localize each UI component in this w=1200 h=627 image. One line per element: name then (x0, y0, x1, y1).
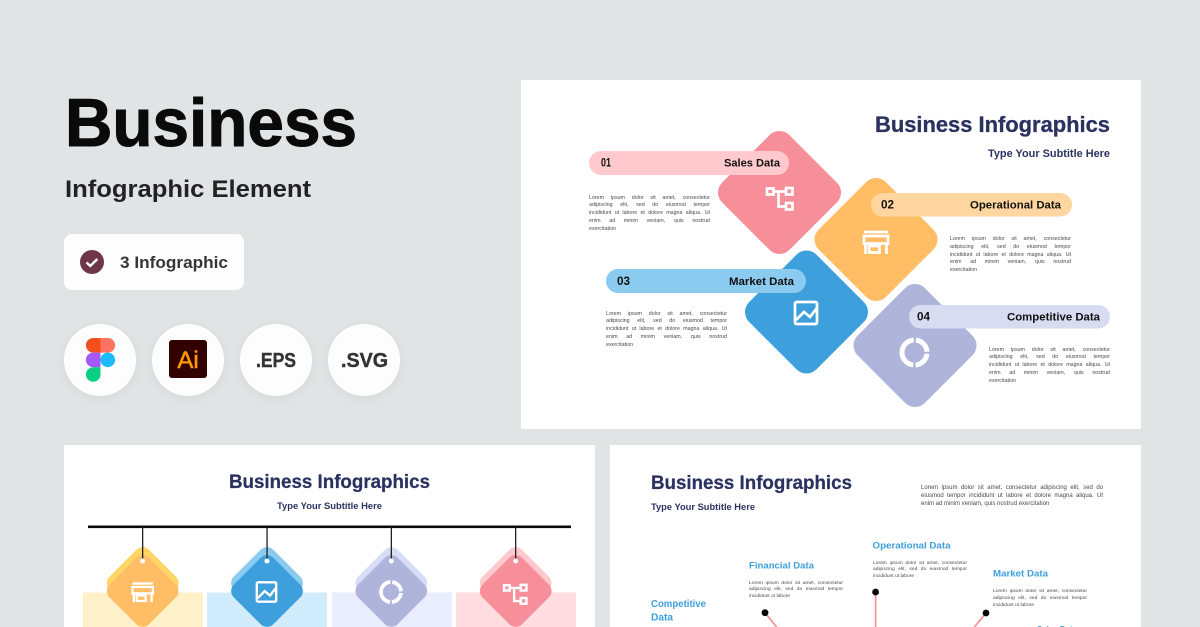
badge: 3 infographic (64, 234, 244, 290)
panel subtitle: Type Your Subtitle Here (651, 502, 755, 513)
text: operational description (950, 236, 1071, 276)
pill: 03 market: 03 (617, 276, 630, 288)
text: competitive description: exercitation (989, 378, 1016, 384)
icon: network (767, 188, 792, 210)
text: intro paragraph: eiusmod tempor incididunt ut labore et dolore magna aliqua. Ut (921, 493, 1103, 499)
text: sales description: Lorem ipsum dolor sit amet, consectetur (589, 194, 710, 200)
text: sales description: exercitation (589, 226, 616, 232)
label: competitive data: Data (651, 612, 673, 624)
text: operational description (873, 560, 967, 582)
pill: 04 competitive: Competitive Data (1007, 312, 1101, 324)
pill: 02 operational (871, 193, 1072, 216)
text: market description: exercitation (606, 342, 633, 348)
tag: operational (103, 527, 182, 627)
text: operational description: exercitation (950, 267, 977, 273)
text: sales description: adipiscing elit, sed do eiusmod tempor (589, 202, 710, 208)
text: sales description: incididunt ut labore et dolore magna aliqua. Ut (589, 210, 710, 216)
text: competitive description: incididunt ut labore et dolore magna aliqua. Ut (989, 362, 1110, 368)
text: financial description: adipiscing elit, sed do eiusmod tempor (749, 587, 843, 592)
icon: shop (864, 232, 888, 254)
marker: market (983, 610, 989, 616)
tag: sales (476, 527, 555, 627)
icon: figma (64, 324, 136, 396)
label: competitive data: Competitive (651, 599, 706, 610)
text: financial description: incididunt ut labore (749, 594, 790, 599)
pill: 02 operational: Operational Data (970, 200, 1062, 212)
text: operational description: adipiscing elit, sed do eiusmod tempor (950, 244, 1071, 250)
text: competitive description: adipiscing elit, sed do eiusmod tempor (989, 354, 1110, 360)
text: operational description: enim ad minim veniam, quis nostrud (950, 259, 1071, 265)
pill: 04 competitive (909, 305, 1110, 328)
text: sales description: enim ad minim veniam, quis nostrud (589, 218, 710, 224)
subtitle: Infographic Element (65, 176, 311, 203)
pill: 01 sales: Sales Data (724, 158, 781, 170)
text: operational description: incididunt ut labore et dolore magna aliqua. Ut (950, 252, 1071, 258)
text: operational description: Lorem ipsum dolor sit amet, consectetur (873, 560, 967, 566)
marker: operational (872, 589, 879, 595)
text: market description (993, 589, 1087, 611)
text: market description: incididunt ut labore (993, 603, 1034, 608)
text: market description: incididunt ut labore et dolore magna aliqua. Ut (606, 326, 727, 332)
text: operational description: Lorem ipsum dolor sit amet, consectetur (950, 236, 1071, 242)
panel subtitle: Type Your Subtitle Here (988, 148, 1110, 160)
pill: 03 market (606, 269, 806, 293)
text: market description: adipiscing elit, sed do eiusmod tempor (993, 596, 1087, 601)
text: market description: adipiscing elit, sed do eiusmod tempor (606, 318, 727, 324)
text: market description: enim ad minim veniam, quis nostrud (606, 334, 727, 340)
icon: check (80, 250, 104, 274)
tag: market (227, 527, 307, 627)
hanging bar (88, 526, 571, 528)
pink connector lines (765, 592, 986, 627)
label: operational data: Operational Data (872, 540, 951, 552)
text: operational description: incididunt ut labore (873, 574, 914, 579)
badge label: 3 Infographic (120, 254, 228, 272)
text: competitive description: enim ad minim veniam, quis nostrud (989, 370, 1110, 376)
icon: eps format (240, 324, 312, 396)
icon: svg format: .SVG (341, 350, 388, 372)
panel title: Business Infographics (229, 471, 430, 493)
icon: svg format (328, 324, 400, 396)
text: intro paragraph: Lorem ipsum dolor sit amet, consectetur adipiscing elit, sed do (921, 484, 1103, 490)
label: competitive data (651, 599, 706, 624)
panel: diamond infographic (521, 80, 1141, 429)
text: intro paragraph (921, 484, 1103, 510)
text: operational description: adipiscing elit, sed do eiusmod tempor (873, 567, 967, 572)
icon: adobe illustrator: Ai (177, 347, 199, 374)
diamond: market (739, 245, 874, 379)
icon: donut (902, 340, 927, 365)
diamond: operational (809, 172, 943, 307)
marker: financial (762, 609, 768, 616)
text: financial description: Lorem ipsum dolor sit amet, consectetur (749, 580, 843, 586)
label: market data: Market Data (993, 568, 1049, 580)
icon: adobe illustrator (152, 324, 224, 396)
text: market description (606, 310, 727, 350)
pill: 04 competitive: 04 (917, 312, 931, 324)
text: competitive description (989, 346, 1110, 386)
panel subtitle: Type Your Subtitle Here (277, 501, 382, 512)
diamond: competitive (848, 278, 982, 413)
pill: 03 market: Market Data (729, 276, 795, 288)
panel title: Business Infographics (875, 112, 1110, 137)
text: sales description (589, 194, 710, 234)
text: market description: Lorem ipsum dolor sit amet, consectetur (993, 589, 1087, 594)
icon: chart (795, 302, 817, 324)
text: financial description (749, 580, 843, 602)
color blocks (83, 592, 576, 627)
icon: eps format: .EPS (256, 350, 296, 372)
pill: 01 sales (589, 151, 789, 175)
text: competitive description: Lorem ipsum dolor sit amet, consectetur (989, 346, 1110, 352)
panel title: Business Infographics (651, 472, 852, 494)
text: intro paragraph: enim ad minim veniam, quis nostrud exercitation (921, 501, 1049, 507)
panel: timeline infographic (610, 445, 1141, 627)
label: financial data: Financial Data (749, 560, 815, 572)
text: market description: Lorem ipsum dolor sit amet, consectetur (606, 310, 727, 316)
tag: competitive (352, 527, 431, 627)
diamond: sales (712, 125, 847, 260)
panel: hanging tags infographic (64, 445, 595, 627)
main title: Business (65, 85, 357, 161)
pill: 01 sales: 01 (601, 158, 611, 170)
pill: 02 operational: 02 (881, 200, 894, 212)
